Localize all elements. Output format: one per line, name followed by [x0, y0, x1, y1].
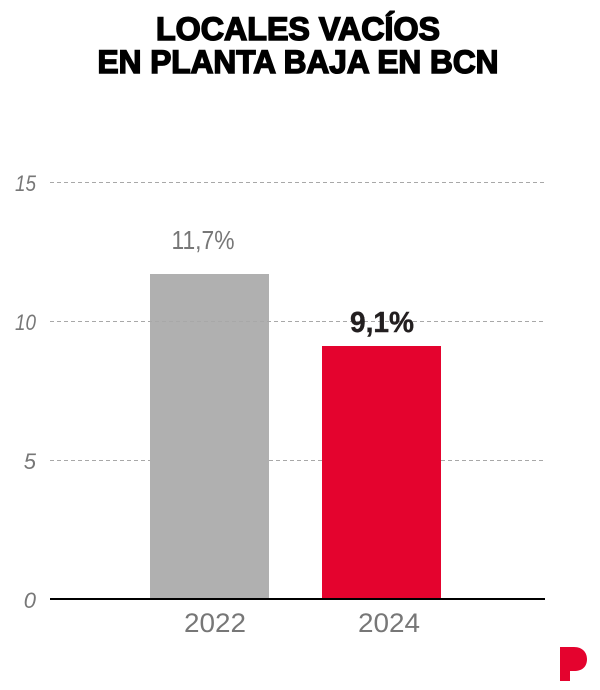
value label: 2022: 11,7% — [172, 225, 234, 255]
title: EN PLANTA BAJA EN BCN — [98, 44, 498, 80]
bar: 2024 — [322, 346, 441, 599]
y axis labels: 10 — [15, 310, 37, 335]
icon: red P logo — [560, 647, 587, 681]
y axis labels: 5 — [24, 449, 37, 474]
x axis line — [50, 598, 545, 600]
y axis labels: 0 — [24, 588, 37, 613]
value label: 2024: 9,1% — [350, 307, 414, 339]
title: LOCALES VACÍOS — [156, 11, 440, 47]
x axis labels: 2024 — [358, 608, 420, 638]
y axis labels — [15, 171, 37, 613]
bar: 2022 — [150, 274, 269, 599]
x axis labels — [184, 608, 420, 638]
y axis labels: 15 — [15, 171, 37, 196]
x axis labels: 2022 — [184, 608, 246, 638]
title — [98, 11, 498, 80]
